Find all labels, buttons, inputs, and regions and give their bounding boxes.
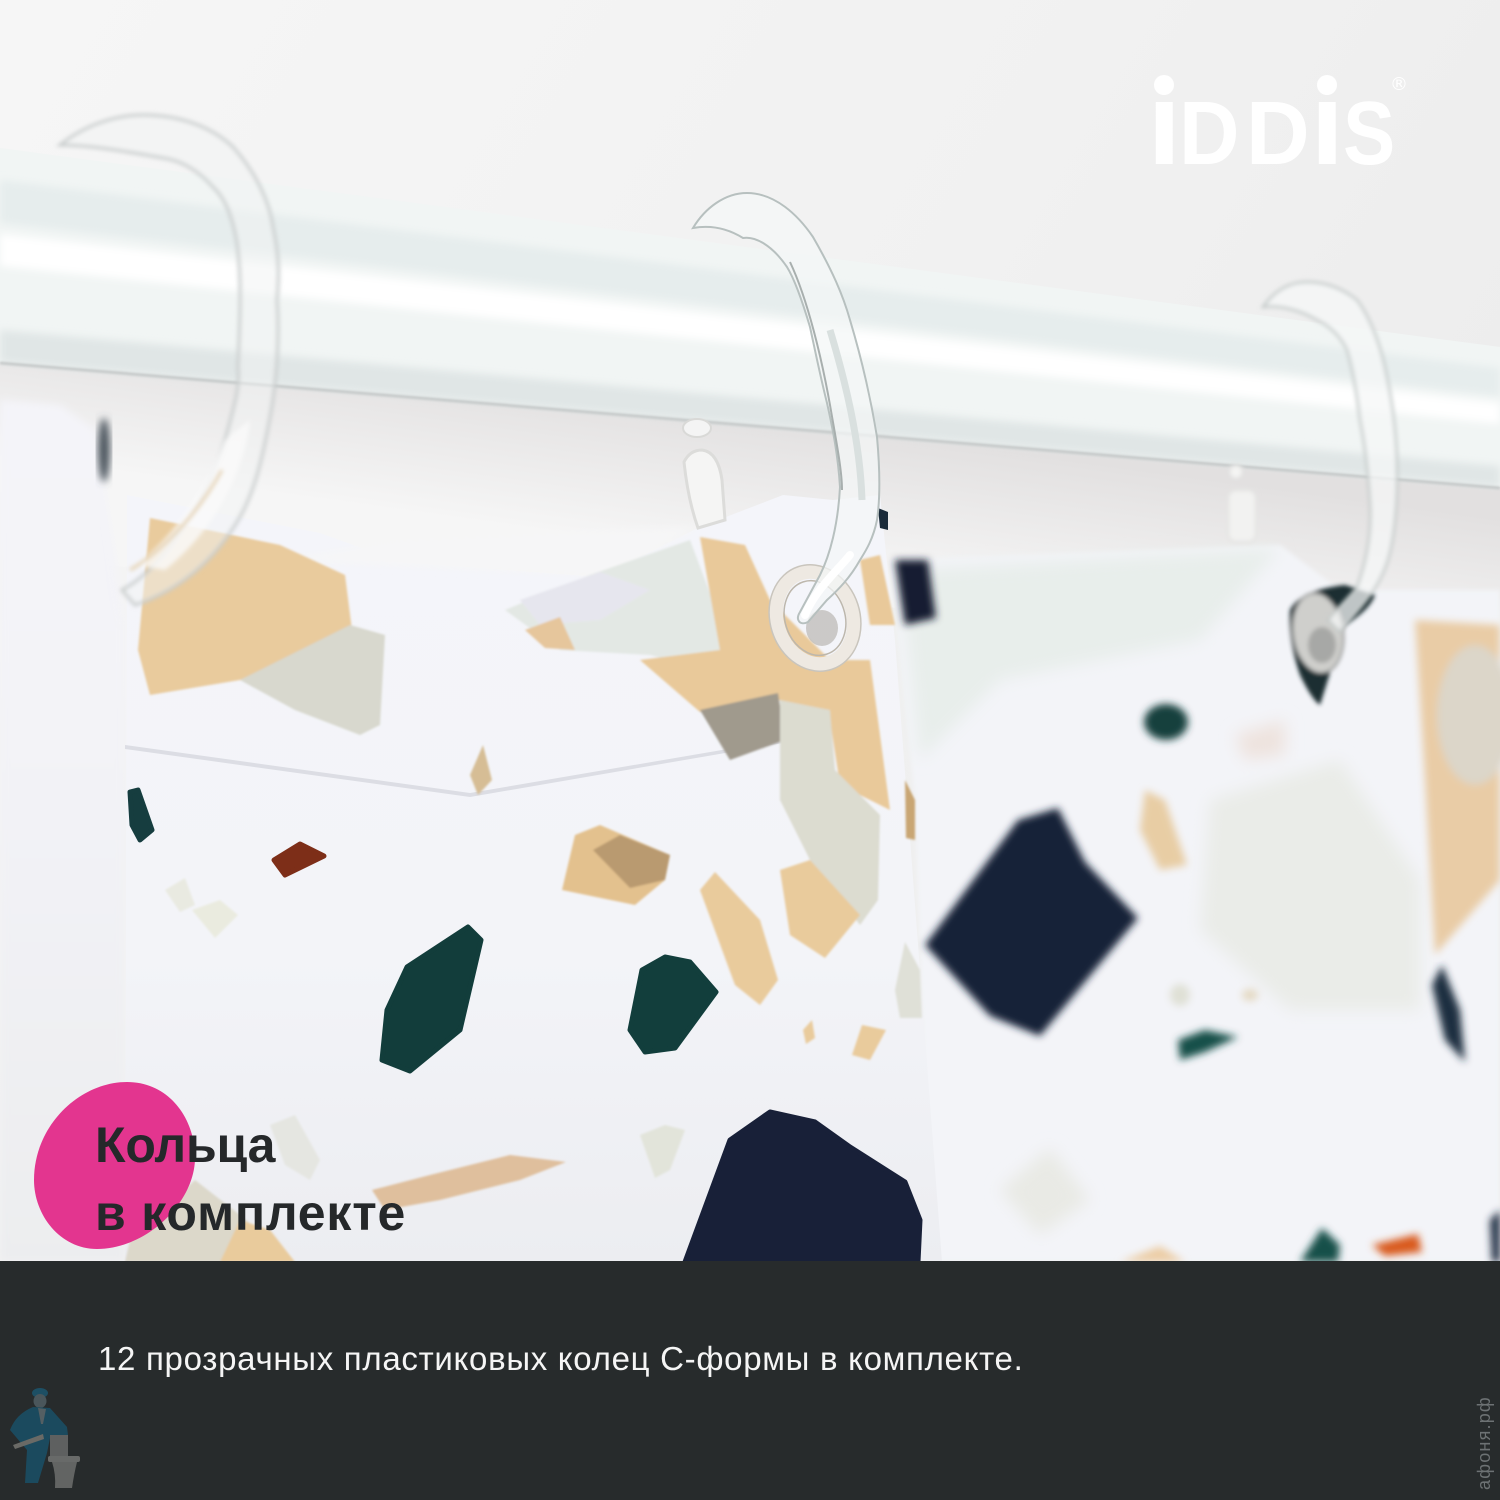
plastic hook behind rod [683, 419, 725, 528]
eyelet right [1288, 585, 1375, 705]
icon: plumber with toilet watermark [10, 1388, 80, 1488]
terrazzo shapes: pastel layer [125, 518, 922, 1262]
logo wordmark: I [1148, 84, 1181, 184]
left blurred curtain fold [0, 400, 125, 1262]
terrazzo shapes: dark chips [130, 508, 920, 1262]
registered mark: ® [1390, 74, 1408, 95]
right curtain panel [890, 545, 1500, 1262]
pink blob accent [34, 1082, 195, 1249]
ring left [60, 115, 278, 605]
ring right [1263, 282, 1397, 632]
logo wordmark: D [1246, 84, 1310, 184]
eyelet left [756, 553, 874, 683]
curtain rod [0, 148, 1500, 488]
logo wordmark: D [1179, 84, 1239, 184]
logo wordmark: I [1311, 84, 1344, 184]
logo: IDDIS [1148, 74, 1408, 184]
logo wordmark: S [1343, 84, 1395, 184]
plastic hook right [1228, 465, 1256, 542]
ring centre [693, 193, 879, 623]
main curtain panel [125, 495, 942, 1262]
heading: в комплекте [95, 1185, 406, 1241]
heading [95, 1117, 406, 1241]
watermark: афоня.рф: афоня.рф [1474, 1396, 1494, 1490]
heading: Кольца [95, 1117, 275, 1173]
dark footer band [0, 1261, 1500, 1500]
logo wordmark [1148, 75, 1395, 184]
description text: 12 прозрачных пластиковых колец С-формы в комплекте. [98, 1340, 1023, 1377]
